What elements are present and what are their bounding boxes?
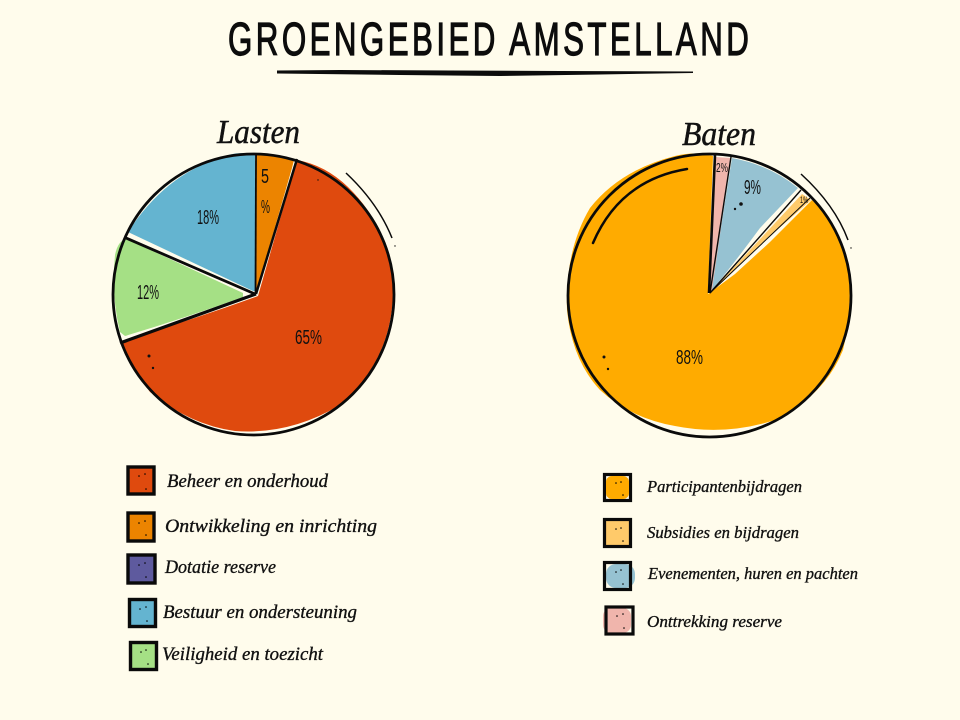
slice: Beheer en onderhoud 65% xyxy=(122,160,393,431)
legend item: Ontwikkeling en inrichting xyxy=(128,513,377,541)
legend item: Participantenbijdragen xyxy=(604,474,802,500)
slice: Ontwikkeling en inrichting 5% xyxy=(255,154,294,291)
title underline xyxy=(277,70,693,76)
label 65%: 65% xyxy=(295,327,322,349)
heading: Baten: Baten xyxy=(682,116,756,153)
pie chart: Lasten xyxy=(113,153,396,435)
pie chart: Baten xyxy=(567,154,852,437)
slice: Veiligheid en toezicht 12% xyxy=(114,239,243,336)
slice: Subsidies en bijdragen 1% xyxy=(710,194,811,293)
legend: Lasten xyxy=(128,467,377,670)
legend item: Bestuur en ondersteuning xyxy=(130,600,357,626)
panel: Lasten xyxy=(113,114,396,435)
heading: Lasten: Lasten xyxy=(216,114,300,151)
label 5%: % xyxy=(261,197,270,217)
slice: Bestuur en ondersteuning 18% xyxy=(128,153,255,291)
legend item: Participantenbijdragen: Participantenbijdragen xyxy=(646,477,802,496)
legend item: Bestuur en ondersteuning: Bestuur en ondersteuning xyxy=(163,602,357,623)
highlight stroke xyxy=(593,169,687,243)
legend item: Onttrekking reserve: Onttrekking reserve xyxy=(647,612,782,631)
label 18%: 18% xyxy=(197,207,219,229)
label 88%: 88% xyxy=(676,347,703,369)
legend item: Beheer en onderhoud xyxy=(128,467,328,494)
legend item: Veiligheid en toezicht: Veiligheid en toezicht xyxy=(162,644,324,665)
slice: Participantenbijdragen 88% xyxy=(567,154,850,430)
legend item: Veiligheid en toezicht xyxy=(130,642,324,670)
legend item: Evenementen, huren en pachten: Evenementen, huren en pachten xyxy=(647,564,858,583)
legend item: Ontwikkeling en inrichting: Ontwikkeling en inrichting xyxy=(165,516,377,537)
chart outline xyxy=(568,154,851,437)
legend item: Evenementen, huren en pachten xyxy=(604,562,858,590)
label 9%: 9% xyxy=(744,177,761,199)
label 5% xyxy=(261,166,270,217)
legend item: Dotatie reserve xyxy=(128,555,276,583)
label 5%: 5 xyxy=(261,166,269,188)
legend item: Dotatie reserve: Dotatie reserve xyxy=(164,557,276,578)
label 1%: 1% xyxy=(800,195,808,205)
label 12%: 12% xyxy=(137,282,159,304)
legend: Baten xyxy=(603,474,858,634)
label 2%: 2% xyxy=(716,160,728,175)
slice: Onttrekking reserve 2% xyxy=(708,157,731,292)
slice: Evenementen, huren en pachten 9% xyxy=(711,158,798,289)
title: GROENGEBIED AMSTELLAND xyxy=(228,14,749,66)
legend item: Subsidies en bijdragen xyxy=(604,520,799,546)
legend item: Subsidies en bijdragen: Subsidies en bijdragen xyxy=(647,523,799,542)
chart outline xyxy=(113,154,394,435)
legend item: Onttrekking reserve xyxy=(603,607,782,634)
panel: Baten xyxy=(567,116,852,437)
legend item: Beheer en onderhoud: Beheer en onderhoud xyxy=(167,471,328,492)
